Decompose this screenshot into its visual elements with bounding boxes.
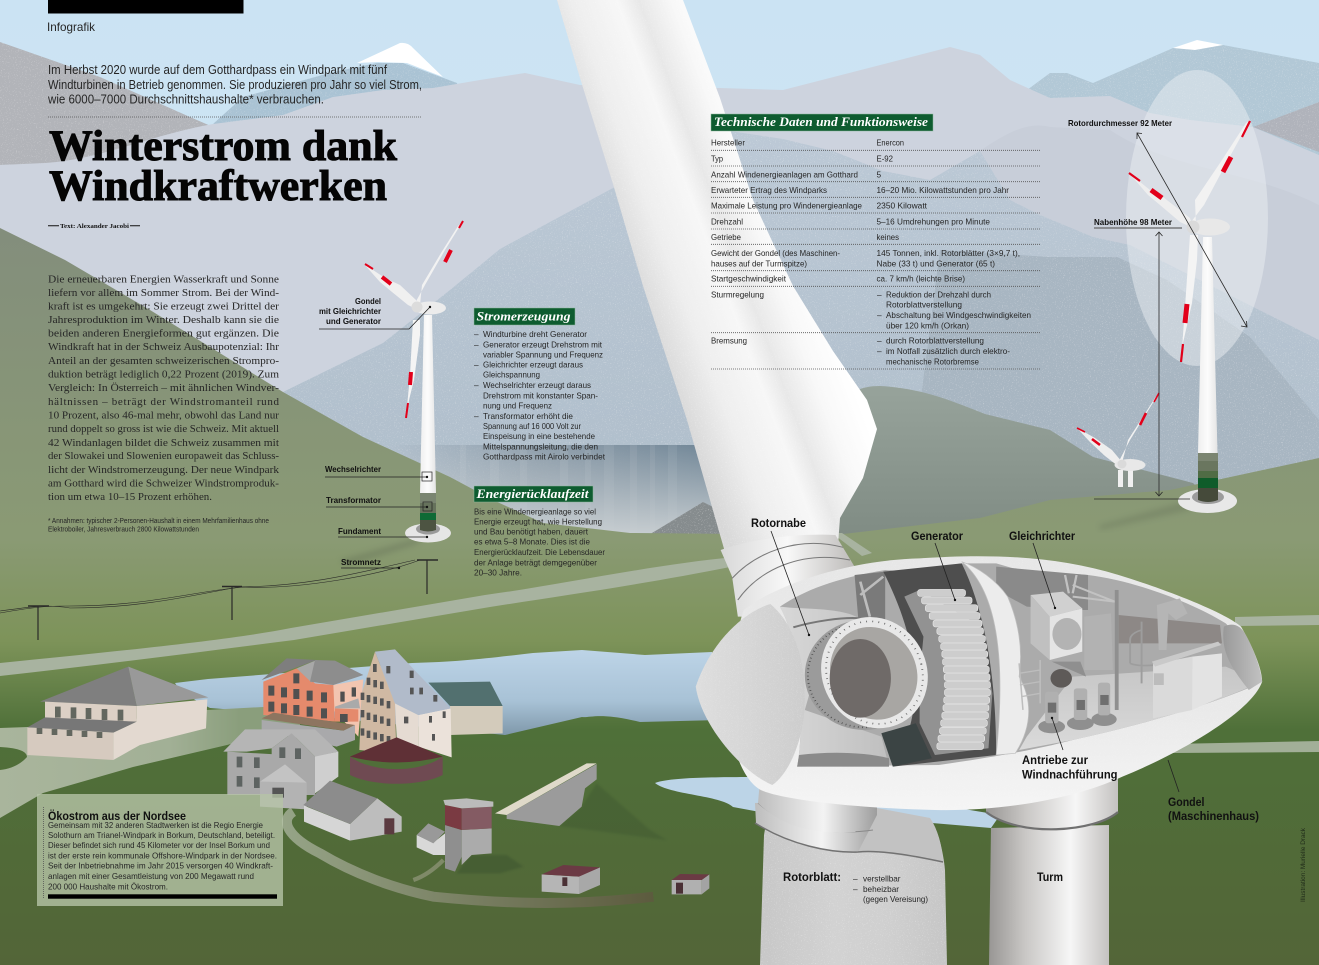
label: Transformator: Transformator [326,495,382,505]
body text: licht der Windstromerzeugung. Der neue Windpark [48,464,279,476]
top black bar [48,0,244,14]
box text: Gemeinsam mit 32 anderen Stadtwerken ist die Regio Energie [48,820,263,830]
label: Wechselrichter: Wechselrichter [325,464,382,474]
body text [48,274,280,503]
dark spokes [881,723,932,767]
box text: Solothurn am Trianel-Windpark in Borkum, Deutschland, beteiligt. [48,830,275,840]
green meadow ground [0,228,1319,965]
body text: beiden anderen Energieformen gut ergänzen. Die [48,328,279,340]
mountain: faint lavender layer, right [980,126,1319,500]
rectifier box (Gleichrichter) [1031,592,1082,660]
label: Wechselrichter [325,464,432,481]
electrical cabinet [1152,642,1222,718]
rear wall tip [1223,625,1262,690]
label: Gondel (Maschinenhaus) [1168,760,1259,823]
village buildings [27,649,653,903]
label: Gleichrichter: Gleichrichter [1009,531,1075,543]
mountain landscape [0,40,1319,560]
label: Transformator [326,495,432,511]
technical data table: durch Rotorblattverstellung [886,336,984,346]
list: Stromerzeugung steps: – [474,339,479,349]
technical data table: im Notfall zusätzlich durch elektro- [886,346,1010,356]
list: Stromerzeugung steps: Mittelspannungsleitung, die den [483,441,598,451]
technical data table: Gewicht der Gondel (des Maschinen- [711,248,840,258]
label: Gleichrichter [1009,531,1075,609]
label: Rotorblatt: Rotorblatt: [783,872,841,884]
intro text [47,63,422,106]
body text: am Gotthard wird die Schweizer Windstromproduk- [48,478,279,490]
label: Gondel: Gondel [355,296,381,306]
technical data table: 16–20 Mio. Kilowattstunden pro Jahr [876,185,1009,195]
body text: Jahresproduktion im Winter. Deshalb kann sie die [48,314,279,326]
curved road [287,812,653,903]
building: barn [303,781,402,841]
body text: 10 Prozent, also 46-mal mehr, obwohl das Land nur [48,410,279,422]
label: Stromnetz: Stromnetz [341,557,381,567]
mountain: blue peak with snow, right [1000,40,1319,200]
list: Stromerzeugung steps [474,329,606,462]
road right of nacelle [1235,615,1319,626]
technical data table: mechanische Rotorbremse [886,356,979,366]
body text: kraft ist es umgekehrt: Sie erzeugt zwei Drittel der [48,300,279,312]
label group: left turbine parts [319,296,432,569]
building: long hall [27,667,208,760]
building: round dark red [350,737,443,784]
technical data table: 5 [876,169,882,179]
label: Generator [911,531,963,601]
list: Stromerzeugung steps: – [474,411,479,421]
blade flange ring [805,608,939,737]
intro text: Windturbinen in Betrieb genommen. Sie produzieren pro Jahr so viel Strom, [48,78,422,92]
text: Energierücklaufzeit [474,506,605,577]
technical data table: Startgeschwindigkeit [711,274,787,284]
small white house [417,823,445,855]
generator coils [918,589,990,750]
text: Energierücklaufzeit: Bis eine Windenergieanlage so viel [474,506,596,516]
body text: Vergleich: In Österreich – mit ähnlichen Windver- [48,382,279,394]
technical data table: – [877,346,882,356]
dimension: rotor diameter: Rotordurchmesser 92 Meter [1068,118,1173,128]
ladder and opening [1019,660,1086,710]
rotor blade features: (gegen Vereisung) [863,894,928,904]
list: Stromerzeugung steps: Spannung auf 16 000 Volt zur [483,421,581,431]
technical data table: Getriebe [711,232,741,242]
technical data table: Maximale Leistung pro Windenergieanlage [711,201,862,211]
body text: Die erneuerbaren Energien Wasserkraft und Sonne [48,274,279,286]
technical data table: ca. 7 km/h (leichte Brise) [876,274,965,284]
house with red roof [542,865,600,894]
lake [175,650,720,735]
label: Gondel [319,296,431,329]
list: Stromerzeugung steps: Transformator erhöht die [483,411,573,421]
side path [413,860,443,880]
road behind blade root [832,533,872,556]
distant lake with vertical stripes [390,445,720,533]
illustration credit: Illustration: Murielle Drack [1300,827,1307,902]
nacelle outer shell (Gondel) [729,556,1262,810]
label: Generator: Generator [911,531,963,543]
dimension: hub height [1094,217,1190,499]
label: Gondel (Maschinenhaus): (Maschinenhaus) [1168,811,1259,823]
technical data table [711,138,1040,369]
nacelle interior back wall [780,563,1262,767]
body text: Windkraft hat in der Schweiz Ausbaupotenzial: Ihr [48,341,279,353]
label: Rotornabe [751,518,810,636]
label: Fundament [338,526,428,538]
label: Stromnetz [341,557,400,569]
body text: rund doppelt so gross ist wie die Schweiz. Mit aktuell [48,423,279,435]
info box: Ökostrom aus der Nordsee [37,794,283,906]
box text: anlagen mit einer Gesamtleistung von 200 Megawatt rund [48,871,254,881]
technical data table: – [877,310,882,320]
body text: hältnissen – beträgt der Windstromanteil rund [48,396,280,408]
rotor blade features: verstellbar [863,874,901,884]
spinner nose cap [696,604,805,785]
blade root collar [721,535,855,617]
technical data table: 2350 Kilowatt [876,201,928,211]
floor [1019,667,1260,750]
text: Energierücklaufzeit: und Bau benötigt haben, dauert [474,527,589,537]
label: Antriebe zur Windnachführung [1022,717,1118,782]
list: Stromerzeugung steps: Wechselrichter erzeugt daraus [483,380,591,390]
road lower right [1170,741,1319,753]
list: Stromerzeugung steps: Windturbine dreht Generator [483,329,587,339]
list: Stromerzeugung steps: – [474,329,479,339]
technical data table: keines [876,232,899,242]
mountain: grey speckled, left [0,42,220,165]
list: Stromerzeugung steps: Gleichrichter erzeugt daraus [483,360,583,370]
shadow of tower [457,855,523,873]
rear drum frame [855,572,885,620]
lower blade section (Rotorblatt) [755,780,947,965]
heading: Energierücklaufzeit: Energierücklaufzeit [475,486,589,501]
mountain: grey speckled, right [1253,102,1319,152]
mountain: blue-grey centre [283,131,1319,560]
technical data table: Nabe (33 t) und Generator (65 t) [876,258,995,268]
main title [49,123,397,210]
box text: Seit der Inbetriebnahme im Jahr 2015 versorgen 40 Windkraft- [48,861,273,871]
nacelle cutaway [696,556,1262,810]
label: Gondel (Maschinenhaus): Gondel [1168,797,1204,809]
dimension: hub height: Nabenhöhe 98 Meter [1094,217,1173,227]
shadow of wall [559,783,667,840]
text: Energierücklaufzeit: 20–30 Jahre. [474,567,522,577]
technical data table: Drehzahl [711,217,743,227]
main title: Winterstrom dank [49,123,397,170]
building: grey house [223,729,338,809]
text: Energierücklaufzeit: Energierücklaufzeit. Die Lebensdauer [474,547,605,557]
hill: small dark, behind blade [640,502,760,545]
box text: Dieser befindet sich rund 45 Kilometer vor der Insel Borkum und [48,840,270,850]
technical data table: Reduktion der Drehzahl durch [886,289,991,299]
technical data table: 145 Tonnen, inkl. Rotorblätter (3×9,7 t), [876,248,1020,258]
mountain: blue peak with snow, left [190,43,470,150]
footnote: Elektroboiler, Jahresverbrauch 2800 Kilowattstunden [48,526,199,534]
rear wall band [1119,615,1222,643]
list: Stromerzeugung steps: Einspeisung in eine bestehende [483,431,595,441]
road, upper meadow [0,557,735,676]
box text: ist der erste rein kommunale Offshore-Windpark in der Nordsee. [48,850,277,860]
list: Stromerzeugung steps: Generator erzeugt Drehstrom mit [483,339,603,349]
rotor blade features [853,874,928,904]
technical data table: über 120 km/h (Orkan) [886,320,969,330]
technical data table: 5–16 Umdrehungen pro Minute [876,217,990,227]
technical data table: Enercon [876,138,904,148]
body text: duktion beträgt lediglich 0,22 Prozent (2019). Zum [48,368,279,380]
dimension: rotor diameter [1068,118,1247,327]
lake, lower part near tower [655,777,1000,828]
technical data table: – [877,289,882,299]
yaw drives [1038,683,1117,733]
body text: tion um etwa 10–15 Prozent erhöhen. [48,491,212,503]
text: Energierücklaufzeit: der Anlage beträgt demgegenüber [474,557,597,567]
label: Antriebe zur Windnachführung: Antriebe zur [1022,755,1089,767]
rotor blade features: beheizbar [863,884,899,894]
heading: Stromerzeugung: Stromerzeugung [476,309,571,324]
building: orange house [262,658,363,747]
main title: Windkraftwerken [49,163,387,210]
technical data table: hauses auf der Turmspitze) [711,258,807,268]
rotor blade features: – [853,884,858,894]
footnote: * Annahmen: typischer 2-Personen-Haushalt in einem Mehrfamilienhaus ohne [48,518,269,525]
body text: Anteil an der gesamten schweizerischen Strompro- [48,355,279,367]
technical data table: Hersteller [711,138,745,148]
intro text: Im Herbst 2020 wurde auf dem Gotthardpass ein Windpark mit fünf [48,63,387,77]
wind turbine large: right [1100,120,1250,530]
list: Stromerzeugung steps: – [474,380,479,390]
power line with three poles [0,560,438,640]
technical data table: Sturmregelung [711,289,764,299]
label: Gondel: und Generator [326,316,382,326]
stator support [904,590,992,755]
text: Energierücklaufzeit: es etwa 5–8 Monate. Dies ist die [474,537,590,547]
crane [1157,598,1188,650]
body text: der Slowakei und Slowenien europaweit das Schluss- [48,450,279,462]
label: Turm: Turm [1037,872,1063,884]
list: Stromerzeugung steps: Gleichspannung [483,370,540,380]
wind turbine small: background [1077,393,1159,487]
technical data table: Typ [711,154,723,164]
technical data table: – [877,336,882,346]
technical data table: Abschaltung bei Windgeschwindigkeiten [886,310,1031,320]
big rotor blade [557,0,877,580]
tower (Turm) [986,770,1118,965]
technical data table: Bremsung [711,336,747,346]
text: Energierücklaufzeit: Energie erzeugt hat, wie Herstellung [474,517,602,527]
plaza / light path [0,705,300,818]
heading: Technische Daten und Funktionsweise: Technische Daten und Funktionsweise [714,114,928,129]
footnote [48,518,269,534]
mountain: darker blue-grey layer [900,250,1319,560]
sloped concrete wall [495,763,597,826]
power plant and small buildings [413,763,709,894]
hub body [780,607,889,767]
section label: Infografik [47,20,96,34]
hill: grey-green behind nacelle [780,386,1240,560]
list: Stromerzeugung steps: – [474,360,479,370]
technical data table: Anzahl Windenergieanlagen am Gotthard [711,169,858,179]
rotor blade features: – [853,874,858,884]
list: Stromerzeugung steps: Gotthardpass mit Airolo verbindet [483,452,606,462]
generator drum [883,563,996,767]
building: teal roof [428,682,503,735]
rack and struts [996,567,1157,710]
byline: Text: Alexander Jacobi [60,223,129,230]
swept rotor area [1126,70,1268,366]
technical data table: E-92 [876,154,893,164]
list: Stromerzeugung steps: Drehstrom mit konstanter Span- [483,390,598,400]
small house right [672,874,709,894]
list: Stromerzeugung steps: nung und Frequenz [483,401,552,411]
box heading: Ökostrom aus der Nordsee [48,808,186,823]
wind turbine small: left with parts [340,221,463,567]
byline [48,223,140,230]
mountain: lavender main range [0,47,1319,560]
technical data table: Erwarteter Ertrag des Windparks [711,185,827,195]
intro text: wie 6000–7000 Durchschnittshaushalte* verbrauchen. [47,92,324,106]
box text: 200 000 Haushalte mit Ökostrom. [48,881,168,891]
building: tall gabled house [359,649,452,757]
box text [48,820,277,891]
label: Rotorblatt [783,872,928,904]
label: Antriebe zur Windnachführung: Windnachführung [1022,770,1118,782]
tower building [443,798,493,872]
list: Stromerzeugung steps: variabler Spannung und Frequenz [483,350,603,360]
stator flange crescent [962,562,1029,755]
label: Rotornabe: Rotornabe [751,518,806,530]
label: Fundament: Fundament [338,526,381,536]
label: Gondel: mit Gleichrichter [319,306,382,316]
body text: 42 Windanlagen bildet die Schweiz zusammen mit [48,437,279,449]
technical data table: Rotorblattverstellung [886,300,962,310]
body text: liefern vor allem im Sommer Strom. Bei der Wind- [48,287,279,299]
